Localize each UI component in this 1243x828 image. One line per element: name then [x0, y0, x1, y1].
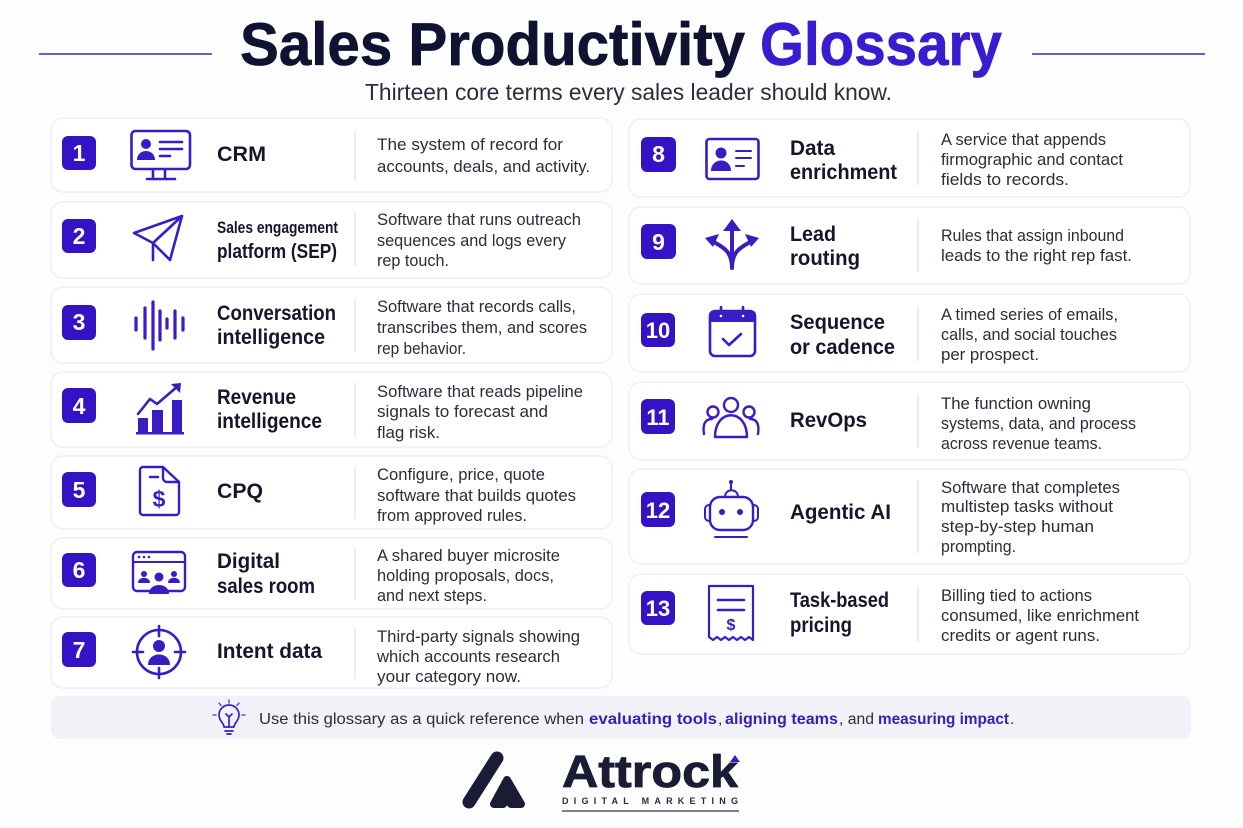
panel: term 11 RevOps: across revenue teams.: [941, 435, 1102, 453]
panel: term 10 sequence or cadence: or cadence: [790, 335, 895, 359]
panel: term 7 intent data: your category now.: [377, 668, 521, 686]
panel: term 4 revenue intelligence: 4: [73, 393, 86, 419]
panel: term 13 task-based pricing: consumed, like enrichment: [941, 607, 1139, 625]
icon: target person: [133, 626, 185, 678]
panel: term 7 intent data: Intent data: [217, 639, 323, 663]
panel: term 3 conversation intelligence: [51, 287, 612, 363]
panel: term 10 sequence or cadence: 10: [646, 318, 670, 343]
panel: term 4 revenue intelligence: Revenue: [217, 385, 296, 409]
panel: term 8 data enrichment: [629, 119, 1190, 197]
icon: contact card: [706, 139, 758, 179]
panel: term 2 SEP: sequences and logs every: [377, 232, 567, 250]
panel: term 12 agentic AI: Software that completes: [941, 479, 1120, 497]
icon: branching arrows: [705, 219, 759, 268]
panel: term 10 sequence or cadence: per prospect.: [941, 346, 1039, 364]
panel: term 2 SEP: rep touch.: [377, 252, 449, 270]
callout: usage tip banner: , and: [839, 711, 874, 728]
panel: term 5 CPQ: [51, 456, 612, 529]
panel: term 8 data enrichment: enrichment: [790, 160, 897, 184]
panel: term 6 digital sales room: [51, 538, 612, 609]
icon: browser with people: [133, 552, 185, 594]
callout: usage tip banner: measuring impact: [878, 711, 1009, 728]
icon: logo mark: [469, 758, 521, 804]
panel: term 9 lead routing: leads to the right rep fast.: [941, 247, 1132, 265]
icon: price document: $: [153, 486, 166, 512]
panel: term 10 sequence or cadence: calls, and social touches: [941, 326, 1117, 344]
icon: receipt: $: [727, 617, 736, 634]
icon: paper plane: [134, 216, 182, 260]
panel: term 9 lead routing: Rules that assign inbound: [941, 227, 1124, 245]
panel: term 8 data enrichment: A service that appends: [941, 131, 1106, 149]
icon: team: [704, 398, 758, 437]
panel: term 9 lead routing: Lead: [790, 222, 836, 246]
logo: Attrock Digital Marketing: DIGITAL MARKETING: [562, 796, 738, 806]
panel: term 6 digital sales room: Digital: [217, 549, 280, 573]
logo: Attrock Digital Marketing: [469, 746, 740, 811]
logo: Attrock Digital Marketing: Attrock: [562, 746, 739, 797]
panel: term 1 CRM: The system of record for: [377, 136, 564, 154]
panel: term 10 sequence or cadence: [629, 294, 1190, 372]
panel: term 11 RevOps: 11: [646, 405, 670, 430]
panel: term 9 lead routing: routing: [790, 246, 860, 270]
panel: term 2 SEP: Software that runs outreach: [377, 211, 581, 229]
panel: term 12 agentic AI: prompting.: [941, 538, 1016, 556]
panel: term 11 RevOps: [629, 382, 1190, 460]
panel: term 1 CRM: accounts, deals, and activity.: [377, 158, 590, 176]
panel: term 6 digital sales room: 6: [73, 557, 85, 583]
callout: usage tip banner: aligning teams: [725, 711, 838, 728]
panel: term 2 SEP: Sales engagement: [217, 218, 338, 237]
panel: term 4 revenue intelligence: Software that reads pipeline: [377, 383, 583, 401]
icon: monitor with profile: [132, 131, 190, 179]
panel: term 4 revenue intelligence: intelligence: [217, 409, 322, 433]
panel: term 8 data enrichment: Data: [790, 136, 836, 160]
panel: term 7 intent data: [51, 617, 612, 688]
panel: term 2 SEP: 2: [73, 223, 85, 249]
panel: term 13 task-based pricing: [629, 574, 1190, 654]
panel: term 13 task-based pricing: 13: [646, 596, 670, 621]
panel: term 3 conversation intelligence: rep behavior.: [377, 340, 466, 358]
callout: usage tip banner: ,: [718, 711, 722, 728]
panel: term 6 digital sales room: holding proposals, docs,: [377, 567, 554, 585]
panel: term 4 revenue intelligence: flag risk.: [377, 424, 440, 442]
panel: term 5 CPQ: from approved rules.: [377, 507, 527, 525]
title: [240, 11, 1003, 78]
panel: term 4 revenue intelligence: [51, 372, 612, 447]
panel: term 5 CPQ: 5: [73, 477, 86, 503]
panel: term 8 data enrichment: 8: [652, 141, 665, 167]
title: Glossary: [760, 11, 1003, 78]
panel: term 2 SEP: platform (SEP): [217, 241, 337, 263]
panel: term 9 lead routing: [629, 207, 1190, 284]
panel: term 5 CPQ: CPQ: [217, 479, 263, 503]
icon: robot: [705, 480, 758, 537]
panel: term 10 sequence or cadence: Sequence: [790, 310, 885, 334]
title: Sales Productivity: [240, 11, 746, 78]
panel: term 3 conversation intelligence: intelligence: [217, 325, 325, 349]
panel: term 3 conversation intelligence: Software that records calls,: [377, 298, 576, 316]
icon: sound wave: [136, 302, 183, 349]
subtitle: Thirteen core terms every sales leader should know.: [365, 79, 892, 105]
callout: usage tip banner: evaluating tools: [589, 711, 717, 728]
panel: term 12 agentic AI: [629, 469, 1190, 564]
icon: light bulb: [213, 700, 245, 734]
panel: term 2 SEP: [51, 202, 612, 278]
panel: term 1 CRM: 1: [73, 140, 86, 166]
panel: term 12 agentic AI: Agentic AI: [790, 500, 891, 524]
panel: term 5 CPQ: software that builds quotes: [377, 487, 576, 505]
panel: term 12 agentic AI: 12: [646, 498, 670, 523]
panel: term 9 lead routing: 9: [652, 229, 665, 255]
icon: price document: [140, 467, 179, 515]
panel: term 7 intent data: 7: [73, 637, 85, 663]
icon: rising bar chart: [136, 383, 184, 434]
panel: term 13 task-based pricing: pricing: [790, 613, 852, 637]
panel: term 6 digital sales room: sales room: [217, 574, 315, 598]
panel: term 7 intent data: Third-party signals showing: [377, 628, 580, 646]
icon: receipt: [709, 586, 753, 640]
panel: term 5 CPQ: Configure, price, quote: [377, 466, 545, 484]
panel: term 11 RevOps: systems, data, and process: [941, 415, 1136, 433]
callout: usage tip banner: Use this glossary as a quick reference when: [259, 711, 584, 728]
icon: calendar check: [710, 307, 755, 356]
panel: term 8 data enrichment: firmographic and contact: [941, 151, 1123, 169]
panel: term 3 conversation intelligence: 3: [73, 309, 85, 335]
panel: term 1 CRM: [51, 118, 612, 192]
panel: term 3 conversation intelligence: Conversation: [217, 301, 336, 325]
panel: term 12 agentic AI: multistep tasks without: [941, 498, 1113, 516]
panel: term 12 agentic AI: step-by-step human: [941, 518, 1094, 536]
panel: term 13 task-based pricing: Billing tied to actions: [941, 587, 1092, 605]
panel: term 3 conversation intelligence: transcribes them, and scores: [377, 319, 587, 337]
panel: term 13 task-based pricing: credits or agent runs.: [941, 627, 1100, 645]
panel: term 11 RevOps: The function owning: [941, 395, 1091, 413]
panel: term 7 intent data: which accounts research: [376, 648, 560, 666]
panel: term 1 CRM: CRM: [217, 142, 266, 166]
callout: usage tip banner: [51, 696, 1191, 739]
panel: term 8 data enrichment: fields to records.: [941, 171, 1069, 189]
panel: term 11 RevOps: RevOps: [790, 408, 867, 432]
panel: term 10 sequence or cadence: A timed series of emails,: [941, 306, 1118, 324]
panel: term 6 digital sales room: A shared buyer microsite: [377, 547, 560, 565]
panel: term 13 task-based pricing: Task-based: [790, 588, 889, 612]
callout: usage tip banner: .: [1010, 711, 1014, 728]
panel: term 6 digital sales room: and next steps.: [377, 587, 487, 605]
panel: term 4 revenue intelligence: signals to forecast and: [377, 403, 548, 421]
